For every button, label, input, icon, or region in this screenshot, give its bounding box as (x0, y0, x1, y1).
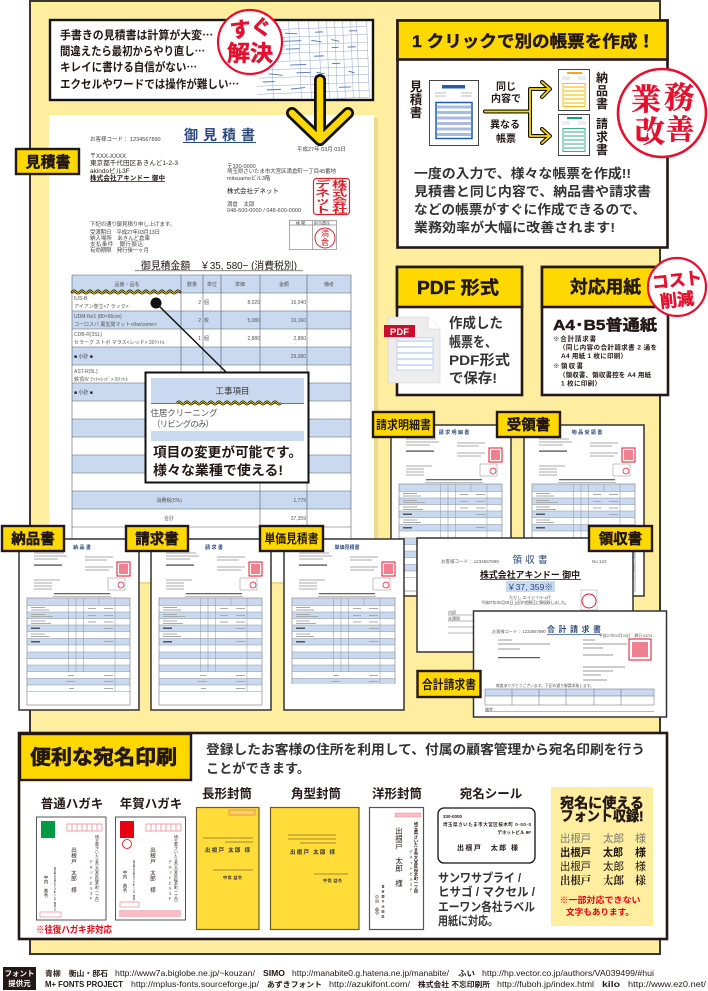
note: some characters unsupported: ※一部対応できない (560, 895, 640, 905)
text: paper notes: （領収書、領収書控を A4 用紙 (559, 370, 652, 379)
card: new year postcard (116, 817, 186, 920)
stamp: work improvement: 善 (666, 108, 694, 148)
table: estimate lines: 29,080 (291, 354, 306, 360)
footer: font credits: 株式会社 不忘印刷所 (418, 979, 491, 989)
text: output labels: 品 (596, 84, 608, 98)
icon: approval box: 担当責任 (314, 220, 330, 226)
title: estimate: 御 見 積 書 (184, 127, 255, 143)
document: invoice: 請 求 書 (205, 544, 223, 551)
document: delivery note: 納 品 書 (73, 544, 91, 551)
envelope: long (196, 808, 259, 930)
document: receipt: 平成27 年 03 月 03 日 上記の金額正に領収致しました。 (481, 599, 569, 606)
text: paper notes (553, 334, 657, 388)
envelope: western: デネットビル３Ｆ (408, 849, 414, 894)
text: source vertical label: 書 (410, 105, 422, 120)
text: one click description: などの帳票がすぐに作成できるので、 (414, 202, 646, 217)
note: some characters unsupported (560, 895, 640, 917)
label: statement: 請求明細書 (376, 417, 431, 432)
text: PDF description: PDF形式 (449, 352, 510, 368)
table: estimate lines: 2 (198, 300, 201, 306)
text: problems list: キレイに書ける自信がない… (60, 59, 197, 75)
text: same / different (490, 81, 521, 145)
stamp: solved at once (218, 10, 282, 74)
label: invoice (126, 526, 188, 551)
text: problems list: エクセルやワードでは操作が難しい… (60, 76, 239, 92)
footer: font credits: あずきフォント (267, 979, 322, 989)
icon: company seal: 株 (332, 177, 348, 190)
footer: font credits: http://azukifont.com/ (329, 979, 411, 989)
text: issuer address: 株式会社デネット (227, 186, 279, 195)
callout: item name change: 項目の変更が可能です。 (153, 444, 302, 460)
headings: media types: 角型封筒 (291, 786, 341, 801)
table: estimate lines: 金額 (279, 281, 289, 288)
text: terms: 支払条件 銀行振込 (90, 240, 143, 248)
table: estimate lines: 8,020 (247, 300, 260, 306)
stamp: work improvement: 務 (664, 73, 694, 117)
label: receipt (589, 526, 652, 551)
label: receipt: 領収書 (599, 530, 642, 548)
label sheet sample (438, 808, 535, 863)
text: output labels: 求 (596, 129, 608, 144)
label: unit price estimate: 単価見積書 (264, 531, 318, 546)
footer: font credits: http://hp.vector.co.jp/authors/VA039499/#hui (482, 968, 654, 978)
label sheet sample: 埼玉県さいたま市大宮区桜木町 0-00-0 (443, 821, 531, 828)
font samples: 出根戸 (560, 832, 591, 845)
text: paper notes: （同じ内容の合計請求書 2 通を (559, 342, 657, 352)
table: estimate lines: 37,359 (291, 516, 306, 522)
label: statement (373, 412, 434, 437)
icon: company seal: 会 (332, 194, 348, 207)
table: estimate lines: 備考 (324, 281, 334, 288)
card: plain postcard: 埼玉県さいたま市大宮区桜木町一丁目 (94, 834, 100, 902)
label: receipt of goods: 受領書 (507, 416, 550, 434)
label sheet sample: デネットビル 9F (497, 829, 531, 836)
stamp: work improvement: 改 (635, 107, 665, 151)
card: new year postcard: デネットビル３Ｆ (167, 859, 172, 902)
font samples: 太郎 (603, 832, 624, 845)
label: delivery note (2, 526, 64, 551)
table: estimate lines: 合計 (164, 515, 174, 522)
text: source vertical label: 積 (410, 92, 423, 107)
callout: item name change: 工事項目 (215, 386, 250, 396)
stamp: solved at once: すぐ (229, 16, 273, 43)
document: invoice (151, 539, 271, 710)
footer: font credits: 提供元 (8, 978, 31, 988)
icon: source document (430, 80, 478, 146)
font samples: 太郎 (603, 872, 624, 888)
table: estimate lines: 2,880 (293, 336, 306, 342)
footer: font credits: ふい (458, 969, 476, 978)
panel: fonts (551, 787, 653, 926)
label sheet sample: 330-0000 (443, 814, 463, 819)
icon: delivery note (558, 70, 590, 110)
card: plain postcard: 中内 善令 (43, 874, 49, 899)
icon: invoice (558, 114, 590, 156)
footer: font credits: kilo (602, 980, 620, 989)
document: receipt (417, 538, 633, 652)
table: estimate lines: 単位 (207, 281, 217, 288)
font samples: 太郎 (603, 860, 624, 873)
label: total invoice (418, 671, 480, 697)
footer: font credits: http://www7a.biglobe.ne.jp/~kouzan/ (115, 968, 256, 978)
table: estimate lines: 数量 (187, 281, 197, 288)
font samples: 様 (635, 872, 646, 888)
icon: company seal: ッ (315, 194, 330, 207)
note: return postcards not supported: ※往復ハガキ非対応 (36, 924, 112, 936)
text: output labels: 納 (596, 70, 608, 85)
text: customer address: akindoビル3F (90, 166, 130, 175)
stamp: work improvement: 業 (631, 75, 661, 119)
footer: font credits: M+ FONTS PROJECT (45, 980, 123, 989)
document: receipt: 株式会社アキンドー 御中 (480, 569, 580, 580)
icon: company seal: ネ (315, 185, 330, 199)
document: statement: 請 求 明 細 書 (439, 429, 469, 436)
text: problems list: 手書きの見積書は計算が大変… (60, 27, 213, 43)
document: receipt: ただし エイジ ﾘﾌｫｰﾑ代 (509, 594, 552, 601)
text: address printing description: 登録したお客様の住所を利用して、付属の顧客管理から宛名印刷を行う (206, 741, 645, 757)
text: paper notes: ※領収書 (553, 361, 584, 370)
arrow: big yellow down arrow (292, 80, 348, 140)
text: one click description (414, 166, 651, 235)
text: terms: 納入場所 あきんど倉庫 (90, 234, 150, 242)
panel: fonts: フォント収録! (560, 808, 644, 824)
icon: approval box: 検 閲 (296, 220, 305, 226)
document: receipt: No.123 (592, 559, 607, 564)
envelope: western: 出根戸 太郎 様 (394, 826, 404, 887)
table: estimate lines: UDM-No1 (80×56cm) (74, 314, 122, 320)
stamp: cost reduction (648, 258, 706, 316)
table: estimate lines: 消費税(5%) (156, 497, 182, 504)
text: one click description: 見積書と同じ内容で、納品書や請求書 (414, 184, 651, 199)
text: supported label makers: ヒサゴ / マクセル / (438, 884, 536, 899)
headings: media types (41, 786, 523, 811)
headings: media types: 宛名シール (460, 786, 523, 801)
text: same / different: 異なる (490, 119, 520, 131)
panel: address printing (19, 733, 667, 939)
text: terms: 受渡期日 平成27年03月13日 (90, 228, 160, 236)
card: plain postcard: デネットビル３Ｆ (88, 859, 94, 902)
text: issuer address: 〒330-0000 (227, 163, 256, 170)
footer: font credits: http://fuboh.jp/index.html (497, 979, 594, 989)
footer: font credits: http://manabite0.g.hatena.ne.jp/manabite/ (292, 968, 450, 978)
text: paper notes: ※合計請求書 (553, 334, 596, 343)
document: receipt: 内訳 (448, 609, 456, 615)
card: plain postcard (36, 817, 106, 920)
callout: item name change: 様々な業種で使える! (153, 462, 283, 478)
text: problems list (60, 27, 239, 92)
document: receipt of goods (524, 425, 644, 596)
text: address printing description (206, 741, 645, 776)
text: supported label makers (438, 871, 536, 928)
footer: font credits: SIMO (263, 969, 285, 978)
panel: one click (398, 20, 668, 248)
headings: media types: 洋形封筒 (372, 786, 422, 801)
text: issuer address: 048-600-0000 / 048-600-0000 (227, 208, 301, 214)
table: estimate lines: 個 (204, 335, 209, 342)
panel: supported paper (542, 267, 668, 395)
text: issuer address (227, 163, 336, 214)
text: customer code: お客様コード： 1234567890 (90, 135, 161, 143)
font samples (560, 831, 646, 888)
text: PDF description: 作成した (449, 315, 503, 331)
decoration: wavy highlight on header (177, 402, 281, 404)
table: estimate lines: 品番・品名 (114, 281, 140, 288)
table: estimate lines: 単価 (235, 281, 245, 288)
text: paper notes: 1 枚に印刷） (561, 378, 601, 388)
panel: fonts: 宛名に使える (560, 795, 644, 811)
card: new year postcard: 東京都千代田区あきんど町一丁目二番地三号 (132, 859, 136, 905)
text: same / different: 同じ (496, 81, 516, 93)
table: estimate lines: 2,880 (247, 336, 260, 342)
document: statement (391, 425, 511, 596)
callout: item name change: （リビングのみ） (152, 419, 214, 429)
headings: media types: 年賀ハガキ (120, 796, 182, 811)
text: supported label makers: 用紙に対応。 (438, 913, 498, 928)
card: new year postcard: 埼玉県さいたま市大宮区桜木町一丁目 (173, 834, 179, 902)
label: unit price estimate (260, 526, 323, 551)
text: problems list: 間違えたら最初からやり直し… (60, 43, 205, 59)
headings: media types: 普通ハガキ (41, 796, 103, 811)
text: terms (90, 220, 175, 254)
table: estimate lines: 鉄頂Ⅳ ｸｯﾄ<ﾚｯﾄﾞ> 5ﾘｯﾄﾙ (74, 376, 128, 383)
document: receipt: ￥37, 359※ (507, 582, 553, 592)
card: plain postcard: 出根戸 太郎 様 (70, 846, 78, 893)
label: total invoice: 合計請求書 (422, 677, 476, 692)
document: receipt: 領 収 書 (512, 554, 548, 566)
font samples: 様 (635, 859, 646, 873)
table: estimate lines: ■ 小計 ■ (74, 389, 93, 396)
font samples: 出根戸 (560, 846, 591, 859)
text: issuer address: 満倉 太郎 (227, 200, 255, 208)
heading: one click: 1 クリックで別の帳票を作成！ (412, 31, 655, 51)
text: paper notes: A4 用紙 1 枚に印刷） (561, 351, 627, 360)
text: PDF description: で保存! (449, 370, 497, 386)
table: estimate lines: ■ 小計 ■ (74, 353, 93, 360)
callout: item name change: 住居クリーニング (150, 408, 218, 418)
decoration: wavy highlight on product column (72, 291, 180, 293)
icon: PDF file: PDF (390, 327, 409, 338)
table: estimate lines: 10,160 (291, 318, 306, 324)
document: main estimate sheet: 平成27年 03月 03日 (297, 145, 346, 153)
icon: company seal: 式 (332, 185, 348, 199)
text: output labels (596, 70, 608, 157)
text: one click description: 業務効率が大幅に改善されます! (414, 220, 615, 235)
icon: company seal: ト (315, 202, 330, 216)
document: total invoice: 備考： (485, 706, 497, 712)
text: terms: 下記の通り御見積り申し上げます。 (90, 220, 175, 228)
icon: company seal (314, 177, 350, 216)
envelope: western: 東京都千代田区 (381, 884, 385, 920)
icon: handwritten form (255, 18, 369, 101)
label: invoice: 請求書 (135, 530, 179, 548)
text: same / different: 内容で (491, 92, 521, 105)
table: estimate lines: 枚 (204, 317, 209, 324)
envelope: square: 出根戸 太郎 様 (290, 848, 335, 856)
document: total invoice: お客様コード： 1234567890 (492, 628, 546, 635)
table: estimate lines: 1 (198, 336, 201, 342)
font samples: 太郎 (603, 845, 623, 859)
document: delivery note (19, 539, 139, 710)
envelope: square (270, 808, 359, 930)
font samples: 出根戸 (560, 860, 591, 873)
table: estimate lines: 5,080 (247, 318, 260, 324)
heading: paper: 対応用紙 (570, 277, 642, 297)
icon: approval box: 倉 (321, 238, 329, 247)
text: output labels: 書 (596, 142, 608, 157)
text: customer address (90, 153, 178, 182)
heading: PDF: PDF 形式 (417, 278, 499, 298)
table: estimate lines: 個 (204, 299, 209, 306)
panel: PDF format (384, 267, 522, 395)
document: receipt: お客様コード： 1234567890 (441, 558, 499, 565)
card: plain postcard: 東京都千代田区あきんど町一丁目二番地三号 (53, 866, 57, 912)
table: estimate lines: 2 (198, 318, 201, 324)
text: one click description: 一度の入力で、様々な帳票を作成!! (414, 166, 631, 181)
text: same / different: 帳票 (496, 132, 516, 145)
text: supported label makers: サンワサプライ / (438, 871, 522, 885)
text: customer address: 東京都千代田区あきんど1-2-3 (90, 158, 178, 167)
table: estimate lines: IUS-B (74, 296, 88, 302)
text: terms: 有効期限 発行後一ヶ月 (90, 246, 149, 254)
label sheet sample: 出根戸 太郎 様 (457, 843, 518, 852)
icon: company seal: 社 (332, 202, 348, 216)
table: estimate lines: アイアン巻立<7 ラック> (74, 303, 129, 310)
icon: approval box: 満 (321, 229, 329, 238)
icon: company seal: デ (315, 177, 331, 190)
footer: font credits: http://mplus-fonts.sourceforge.jp/ (131, 979, 260, 989)
text: address printing description: ことができます。 (206, 760, 310, 776)
document: total invoice (474, 611, 666, 717)
document: main estimate sheet (49, 115, 378, 584)
font samples: 様 (635, 831, 646, 845)
document: unit price estimate (284, 539, 404, 710)
document: unit price estimate: 単価見積書 (334, 544, 360, 551)
stamp: cost reduction: 削減 (659, 289, 695, 312)
footer: font credits: フォント (4, 969, 34, 978)
table: estimate lines: コーロスパ 風玄関マット<the/come> (74, 321, 157, 328)
label: delivery note: 納品書 (11, 530, 55, 548)
table: estimate lines: 16,040 (291, 300, 306, 306)
arrow: branching (485, 82, 550, 143)
label: receipt of goods (497, 412, 560, 437)
heading: address printing: 便利な宛名印刷 (30, 746, 177, 769)
document: receipt: 非課税 (448, 615, 460, 621)
card: new year postcard: 出根戸 太郎 様 (148, 846, 158, 893)
font samples: 出根戸 (560, 872, 591, 888)
document: total invoice: 合 計 請 求 書 (547, 624, 601, 634)
table: estimate lines: AST-R(5L) (74, 369, 98, 375)
label: estimate: 見積書 (25, 153, 71, 171)
text: output labels: 請 (596, 116, 608, 131)
document: receipt of goods: 物 品 受 領 書 (572, 429, 602, 436)
table: estimate lines (72, 275, 351, 582)
heading: estimate amount: 御見積金額 ￥35, 580− (消費税別) (141, 259, 297, 272)
document: total invoice: 平成27年03月03日 締日:03/31 (599, 633, 653, 638)
text: customer address: 〒XXX-XXXX (90, 153, 126, 160)
text: supported label makers: エーワン各社ラベル (438, 899, 535, 914)
card: new year postcard: 中内 善令 (122, 869, 128, 894)
text: issuer address: 埼玉県さいたま市大宮区満倉町一丁目45番地 (227, 167, 336, 175)
callout: item name change (146, 298, 308, 482)
heading: address printing (20, 734, 191, 780)
text: output labels: 書 (596, 96, 608, 111)
envelope: western (370, 808, 424, 930)
stamp: work improvement (618, 69, 706, 157)
text: PDF description: 帳票を、 (449, 334, 497, 350)
envelope: square: 中尚 益令 (323, 877, 343, 884)
footer: font credits: 青柳 衡山・邸石 (45, 968, 109, 978)
text: paper sizes: A4･B5普通紙 (553, 316, 657, 334)
envelope: long: 中尚 益令 (223, 874, 243, 881)
panel: problems box (50, 18, 373, 101)
table: estimate lines: セラーグ ストボ マラス<レッド> 30ﾘｯﾄﾙ (74, 339, 165, 346)
footer: font credits (3, 967, 707, 990)
envelope: western: 中尚 益令 (374, 894, 380, 916)
envelope: long: 出根戸 太郎 様 (205, 846, 250, 854)
note: some characters unsupported: 文字もあります。 (566, 907, 634, 917)
table: estimate lines: CDB-R(3SL) (74, 332, 102, 338)
font samples: 様 (635, 845, 646, 859)
text: source vertical label: 見 (410, 80, 423, 94)
table: estimate lines: 1,779 (293, 498, 306, 504)
icon: approval box (290, 220, 336, 250)
stamp: solved at once: 解決 (227, 41, 273, 66)
text: PDF description (449, 315, 510, 386)
envelope: western: 埼玉県さいたま市大宮区桜木町一丁目 (413, 821, 419, 895)
headings: media types: 長形封筒 (202, 786, 252, 801)
stamp: cost reduction: コスト (651, 268, 703, 293)
label: estimate (16, 149, 79, 174)
footer: font credits: http://www.ez0.net/ (628, 979, 707, 989)
document: total invoice: 毎度ありがとうございます。下記の通り御請求致します。 (496, 683, 594, 688)
text: source vertical label (410, 80, 423, 120)
text: issuer address: mitsuamoビル3階 (227, 174, 271, 182)
text: customer address: 株式会社アキンドー 御中 (90, 173, 165, 182)
